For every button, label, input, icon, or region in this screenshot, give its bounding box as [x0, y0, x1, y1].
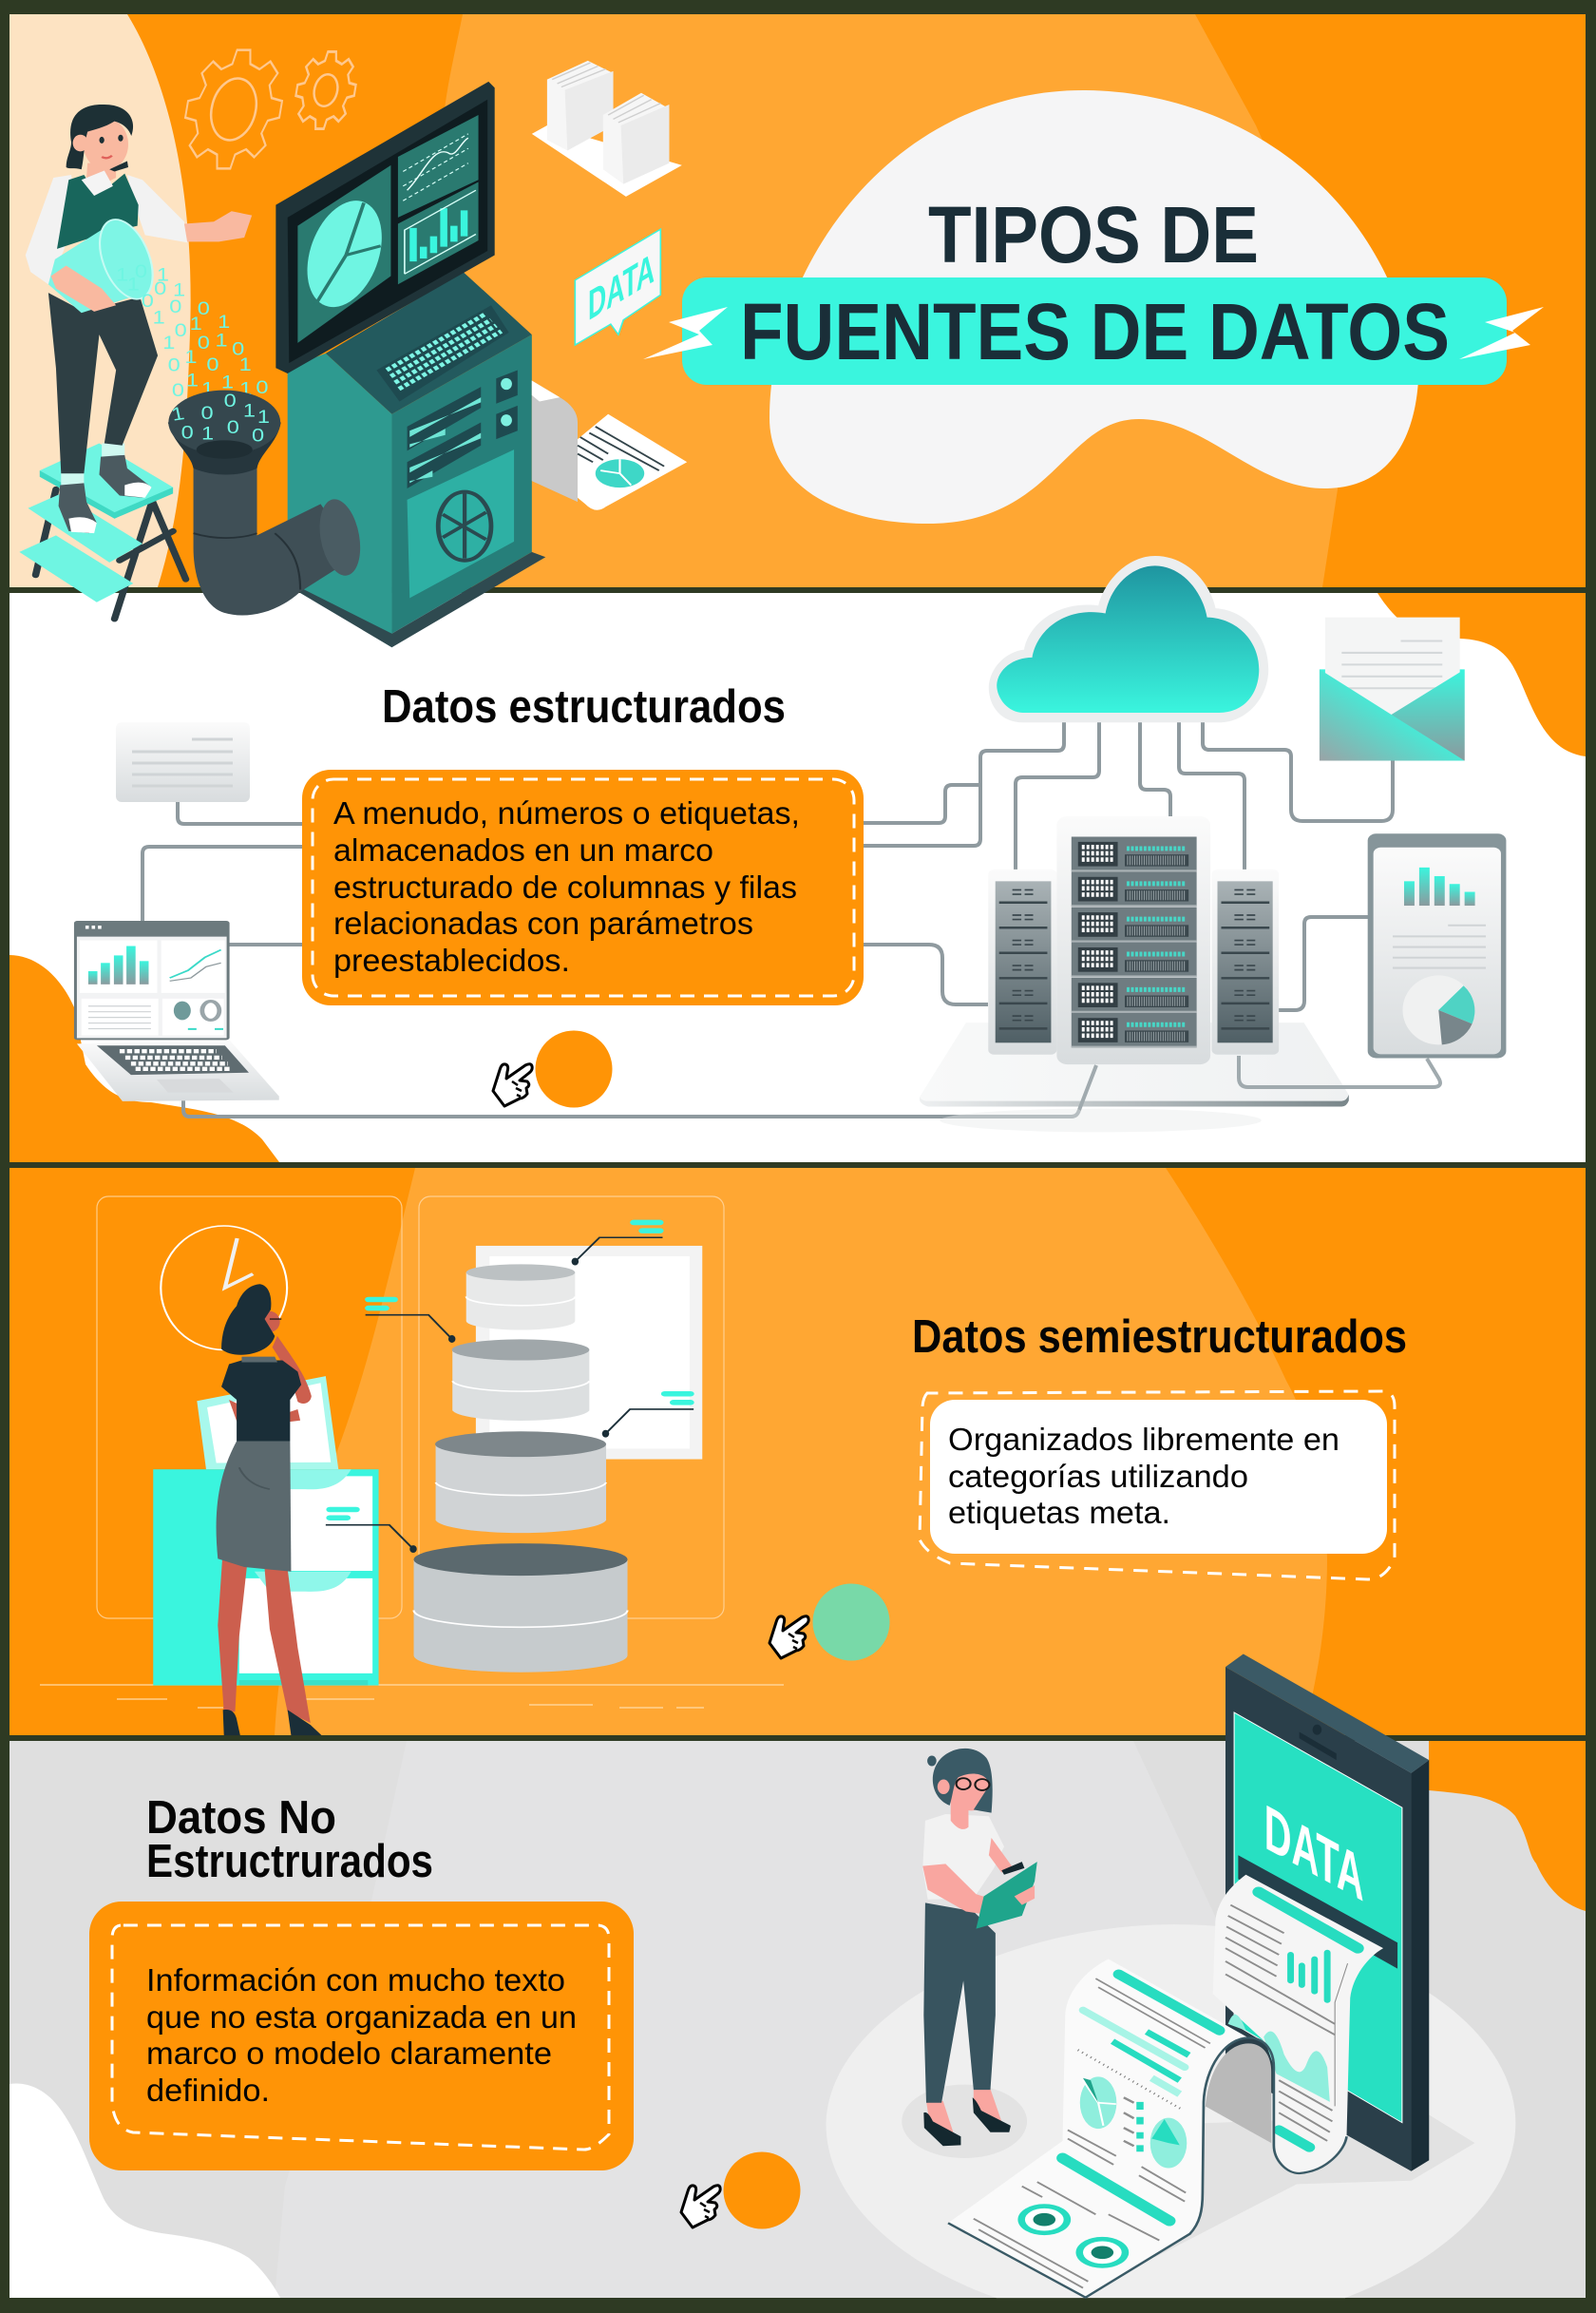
clock [161, 1226, 287, 1349]
icon: left lightning [643, 307, 728, 359]
funnel pipe: 0 [227, 416, 239, 437]
panel: unstructured callout box: definido. [146, 2073, 270, 2108]
arch shadow [1206, 2043, 1271, 2143]
floor lines [40, 1685, 784, 1708]
panel: structured data callout box: estructurado de columnas y filas [333, 870, 797, 905]
title line two: FUENTES DE DATOS [740, 287, 1450, 376]
funnel pipe: 0 [252, 425, 264, 446]
panel: unstructured callout box [89, 1902, 634, 2170]
heading: structured data: Datos estructurados [382, 681, 786, 733]
panel: structured data callout box: almacenados en un marco [333, 832, 713, 868]
callout leaders and labels [326, 1222, 694, 1553]
binary digits: 1 [184, 346, 197, 367]
illustration: laptop [74, 921, 279, 1101]
panel: semi-structured callout box: categorías utilizando [948, 1459, 1248, 1494]
binary digits: 0 [135, 260, 147, 282]
central server rack [1056, 816, 1210, 1064]
binary digits: 0 [256, 376, 268, 398]
binary digits: 1 [157, 264, 169, 285]
binary digits: 0 [232, 338, 244, 359]
phone [1226, 1654, 1429, 2171]
server tower dashes [999, 889, 1269, 1028]
heading: semi-structured data: Datos semiestructurados [912, 1311, 1407, 1363]
illustration: person with bucket, machine and documents [19, 61, 687, 647]
binary digits: 0 [168, 354, 180, 375]
binary digits: 0 [198, 297, 210, 318]
panel: structured data callout box [302, 770, 864, 1005]
shadow [1154, 2114, 1474, 2258]
funnel pipe: 1 [201, 423, 214, 444]
heading: unstructured data: Estructrurados [146, 1836, 433, 1887]
platform [920, 1023, 1349, 1132]
icon: hand pointing at green circle [770, 1583, 889, 1661]
file cabinet [153, 1469, 379, 1686]
stand with paper [197, 1376, 338, 1469]
funnel pipe [168, 390, 366, 616]
monitor with charts [276, 82, 495, 373]
person [26, 105, 252, 533]
icon: gears [177, 50, 361, 168]
document icon [116, 722, 250, 802]
binary digits: 1 [221, 371, 234, 392]
upper report sheet [1213, 1875, 1383, 2173]
funnel pipe: 0 [181, 422, 194, 443]
wires crossing the platform [1079, 1056, 1440, 1110]
heading: unstructured data [146, 1792, 433, 1887]
section dividers [0, 587, 1596, 1741]
binary digits: 1 [190, 313, 202, 334]
binary digits: 1 [239, 354, 252, 374]
funnel pipe: 1 [243, 399, 256, 421]
panel: semi-structured callout box: etiquetas meta. [948, 1495, 1170, 1530]
lower report sheet [948, 1959, 1346, 2298]
panel frames [97, 1196, 724, 1618]
binary digits: 0 [154, 277, 166, 298]
left server tower [988, 870, 1056, 1055]
panel: semi-structured callout box: Organizados libremente en [948, 1422, 1340, 1457]
binary digits: 1 [153, 307, 165, 328]
binary digits: 1 [218, 311, 230, 333]
binary digits: 0 [169, 296, 181, 317]
binary digits: 0 [206, 354, 218, 374]
illustration: phone printing report and woman [826, 1654, 1515, 2298]
binary digits: 0 [198, 332, 210, 354]
paper roll and printed page [532, 380, 687, 510]
icon: right lightning [1459, 307, 1544, 359]
funnel pipe: 0 [224, 390, 237, 411]
panel: semi-structured callout box [920, 1391, 1395, 1579]
funnel pipe: 1 [169, 402, 186, 425]
heading: unstructured data: Datos No [146, 1792, 336, 1844]
DATA label on bubble: DATA [588, 244, 655, 331]
tablet with charts [1368, 833, 1506, 1058]
binary digits: 0 [175, 319, 187, 340]
white document background [476, 1246, 702, 1460]
binary digits: 1 [162, 332, 175, 354]
icon: hand pointing at orange circle [681, 2151, 800, 2229]
funnel pipe: 1 [257, 406, 270, 427]
binary digits: 1 [173, 279, 185, 300]
title line one: TIPOS DE [928, 190, 1259, 279]
binary digits: 0 [172, 379, 184, 400]
envelope [1320, 618, 1465, 761]
DATA speech bubble [575, 229, 660, 345]
panel: unstructured callout box: Información con mucho texto [146, 1962, 565, 1998]
binary digits: 0 [142, 290, 154, 312]
machine body [288, 272, 545, 647]
binary digits: 1 [239, 377, 252, 399]
binary digits: 1 [215, 329, 228, 351]
binary digits: 1 [201, 377, 214, 399]
DATA on phone screen: DATA [1264, 1791, 1364, 1916]
title banner [682, 277, 1507, 385]
woman [217, 1284, 322, 1735]
binary digits [116, 260, 268, 400]
ground ellipse [826, 1924, 1515, 2298]
cloud [989, 556, 1268, 722]
funnel pipe: 0 [200, 402, 214, 423]
illustration: woman with cylinders and cabinet [153, 1222, 702, 1735]
icon: hand pointing at orange circle [493, 1030, 612, 1108]
binary digits: 1 [127, 273, 140, 295]
illustration: cloud, envelope, servers and tablet [920, 556, 1506, 1132]
title blob [770, 90, 1418, 524]
panel: structured data callout box: A menudo, números o etiquetas, [333, 795, 800, 831]
woman with clipboard [902, 1749, 1037, 2158]
panel: structured data callout box: preestablecidos. [333, 943, 570, 978]
panel: unstructured callout box: que no esta organizada en un [146, 1999, 577, 2035]
shelf with binders [532, 61, 682, 197]
panel: structured data callout box: relacionadas con parámetros [333, 906, 753, 941]
binary digits: 1 [116, 264, 128, 285]
right server tower [1212, 870, 1279, 1055]
panel: unstructured callout box: marco o modelo claramente [146, 2036, 552, 2071]
binary digits: 1 [186, 370, 199, 391]
cylinder stack [414, 1264, 628, 1673]
wires network [142, 722, 1393, 1117]
stepladder [19, 444, 186, 619]
